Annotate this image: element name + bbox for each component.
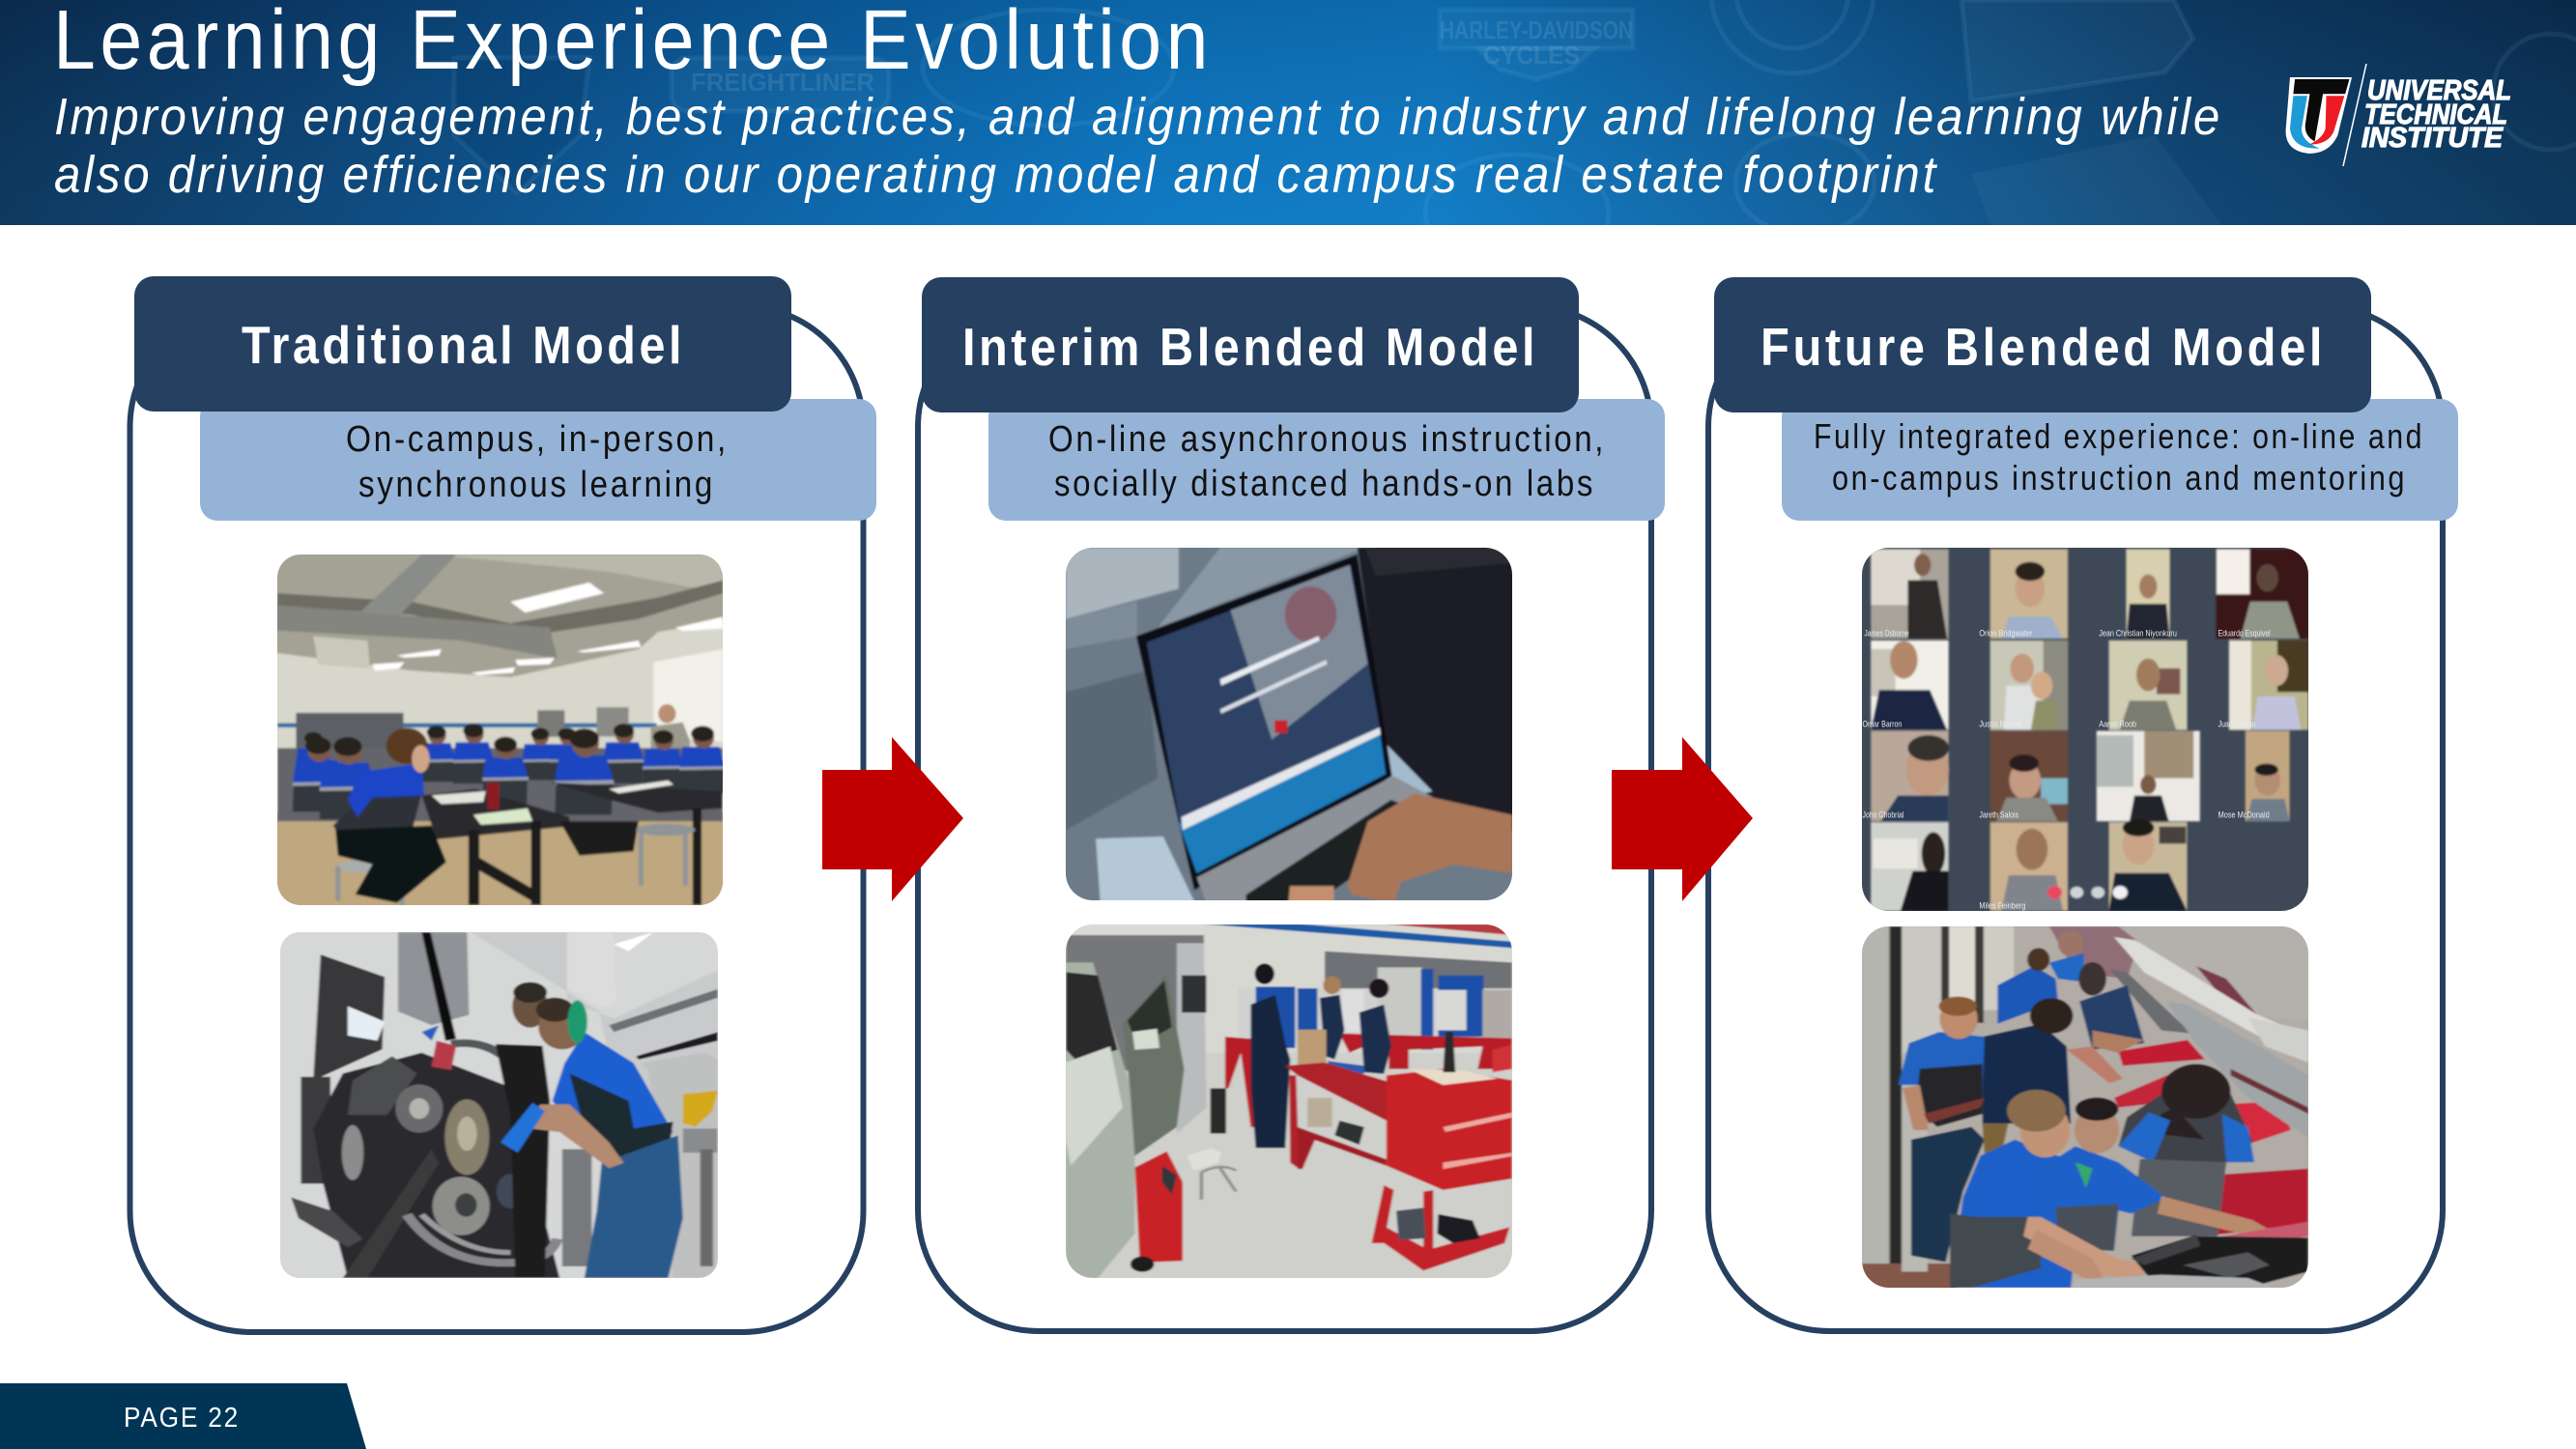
- logo shield icon: [2286, 77, 2352, 154]
- description box: socially distanced hands-on labs: [1054, 464, 1595, 504]
- subtitle: Improving engagement, best practices, and alignment to industry and lifelong learning while: [54, 88, 2222, 146]
- logo wordmark: TECHNICAL: [2364, 99, 2507, 130]
- participant name labels: [1863, 629, 2271, 911]
- description box: [200, 399, 876, 521]
- participant name labels: James Osborne: [1865, 629, 1909, 639]
- description box: On-campus, in-person,: [346, 419, 729, 460]
- participant name labels: John Ghobrial: [1863, 810, 1903, 820]
- heading box: [922, 277, 1579, 412]
- panel: Interim Blended Model: [918, 277, 1665, 1331]
- participant name labels: Jean Christian Niyonkuru: [2099, 629, 2177, 639]
- photo: classroom of students: [277, 554, 723, 905]
- participant name labels: Juan Galvan: [2218, 720, 2255, 729]
- description box: On-line asynchronous instruction,: [1048, 419, 1606, 460]
- heading box: [1714, 277, 2371, 412]
- participant name labels: Omar Barron: [1863, 720, 1902, 729]
- photo: video call grid: [1858, 546, 2312, 912]
- faint brand wordmarks: HARLEY-DAVIDSON: [1440, 15, 1633, 44]
- heading box: Traditional Model: [242, 315, 685, 375]
- faint brand wordmarks: FREIGHTLINER: [691, 68, 874, 97]
- participant name labels: Justin Norten: [1979, 720, 2021, 729]
- description box: [1782, 399, 2458, 521]
- photo: technicians at car engine: [1850, 918, 2321, 1294]
- faint brand emblem background: [452, 0, 2576, 225]
- panel: Future Blended Model: [1708, 277, 2458, 1331]
- participant name labels: Jareth Salois: [1979, 810, 2018, 820]
- subtitle: [54, 88, 2222, 204]
- logo wordmark: UNIVERSAL: [2367, 75, 2511, 106]
- heading box: Future Blended Model: [1760, 317, 2326, 377]
- participant name labels: emerson: [2099, 810, 2127, 820]
- arrow: traditional to interim: [822, 737, 963, 901]
- participant name labels: Aaron Roob: [2099, 720, 2136, 729]
- page number tab: PAGE 22: [124, 1403, 240, 1434]
- panel: Traditional Model: [129, 276, 876, 1332]
- participant name labels: Mose McDonald: [2218, 810, 2270, 820]
- description box: Fully integrated experience: on-line and: [1814, 416, 2424, 456]
- header banner: [0, 0, 2576, 225]
- faint brand wordmarks: [691, 15, 1633, 97]
- page number tab: [0, 1383, 366, 1449]
- arrow: interim to future: [1612, 737, 1753, 901]
- subtitle: also driving efficiencies in our operating model and campus real estate footprint: [54, 146, 1938, 204]
- faint brand wordmarks: CYCLES: [1483, 41, 1580, 70]
- participant name labels: Miles Feinberg: [1979, 901, 2025, 911]
- heading box: [134, 276, 791, 412]
- logo wordmark: INSTITUTE: [2361, 123, 2504, 154]
- description box: on-campus instruction and mentoring: [1832, 458, 2407, 497]
- logo wordmark: [2361, 75, 2511, 154]
- description box: synchronous learning: [358, 465, 715, 505]
- description box: [988, 399, 1665, 521]
- participant name labels: Eduardo Esquivel: [2218, 629, 2271, 639]
- photo: students in socially distanced lab: [1053, 918, 1522, 1285]
- logo: Universal Technical Institute: [2286, 64, 2511, 166]
- participant name labels: Orion Bridgwater: [1979, 629, 2033, 639]
- photo: technicians working on engine: [269, 925, 728, 1284]
- photo: student on laptop: [1054, 537, 1526, 912]
- heading box: Interim Blended Model: [962, 317, 1538, 377]
